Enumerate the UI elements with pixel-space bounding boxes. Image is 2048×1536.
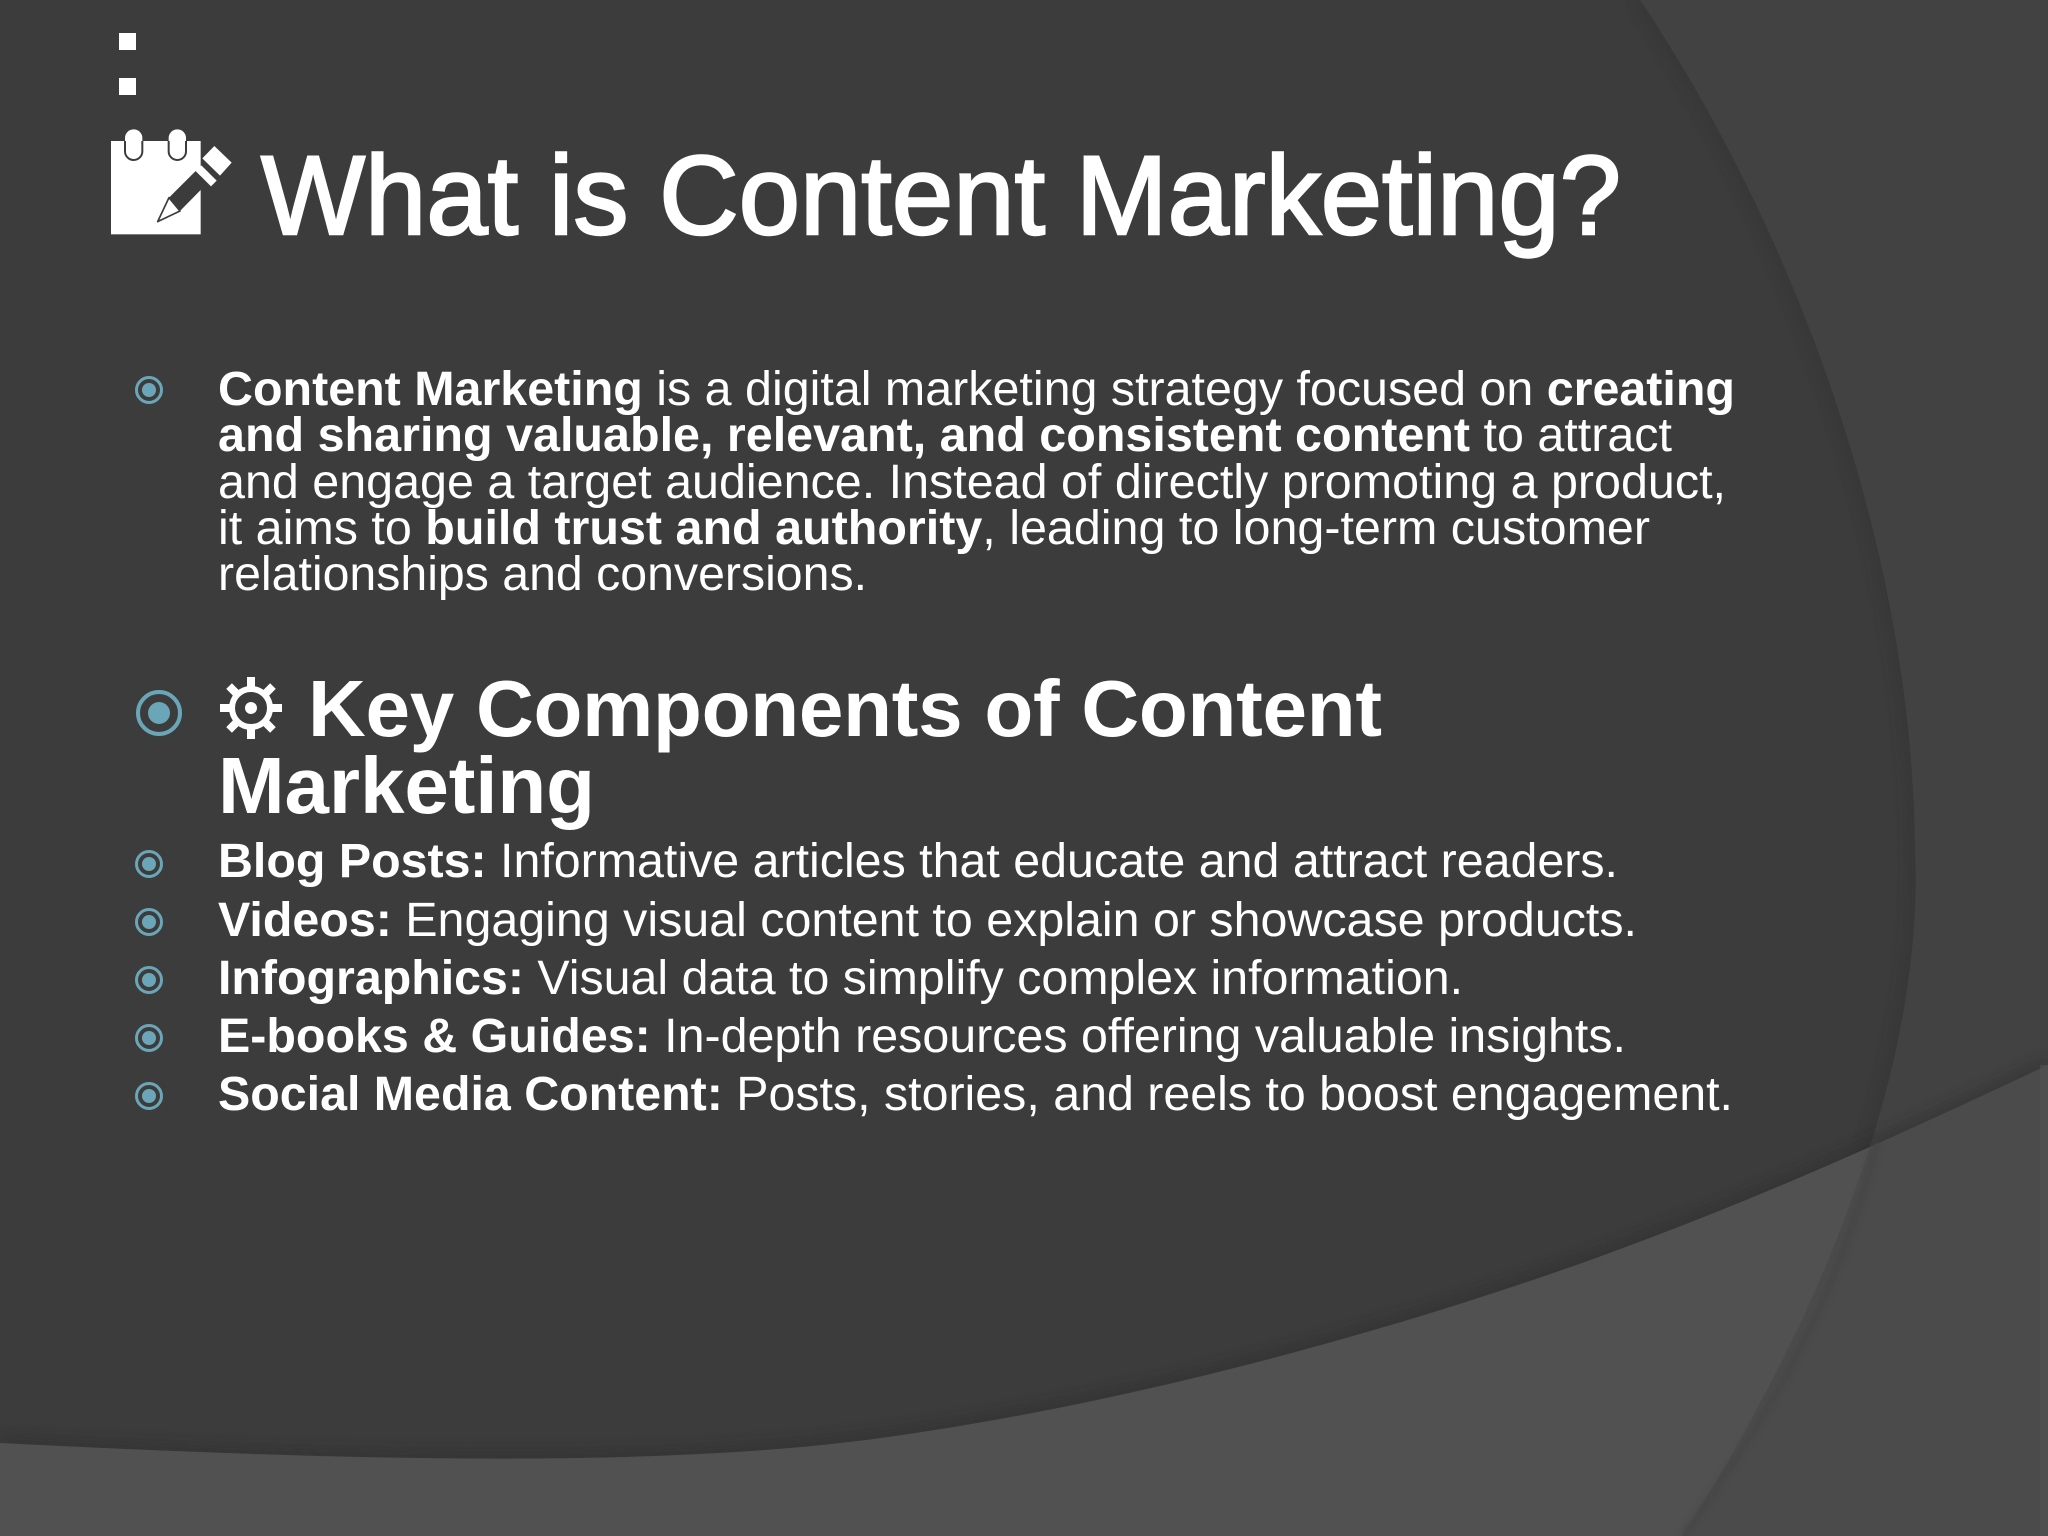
list item: infographics: Infographics: Visual data to simplify complex information.	[218, 952, 1463, 1005]
heading: key components	[218, 664, 1382, 830]
list item: blog posts: Blog Posts: Informative articles that educate and attract readers.	[218, 835, 1618, 888]
icon: gear	[220, 677, 282, 739]
list item: e-books and guides: E-books & Guides: In-depth resources offering valuable insights.	[218, 1010, 1626, 1063]
heading: key components: Marketing	[218, 741, 595, 830]
intro paragraph: relationships and conversions.	[218, 548, 867, 601]
intro paragraph	[218, 363, 1735, 601]
bullet: intro paragraph	[136, 378, 162, 402]
intro paragraph: and sharing valuable, relevant, and consistent content to attract	[218, 409, 1672, 462]
title: What is Content Marketing?	[261, 133, 1621, 258]
icon: notepad and pencil	[111, 129, 232, 234]
background: right arc panel	[1640, 0, 2048, 1536]
intro paragraph: and engage a target audience. Instead of directly promoting a product,	[218, 456, 1726, 509]
heading: key components: Key Components of Content	[308, 664, 1382, 753]
list item: videos: Videos: Engaging visual content to explain or showcase products.	[218, 894, 1637, 947]
component list	[136, 835, 1733, 1121]
intro paragraph: it aims to build trust and authority, leading to long-term customer	[218, 502, 1650, 555]
decorative colon squares above title	[119, 33, 136, 95]
list item: social media content: Social Media Content: Posts, stories, and reels to boost engagement.	[218, 1068, 1733, 1121]
background: bottom swoosh band	[0, 1065, 2048, 1536]
intro paragraph: Content Marketing is a digital marketing strategy focused on creating	[218, 363, 1735, 416]
bullet: key components heading	[138, 692, 180, 734]
